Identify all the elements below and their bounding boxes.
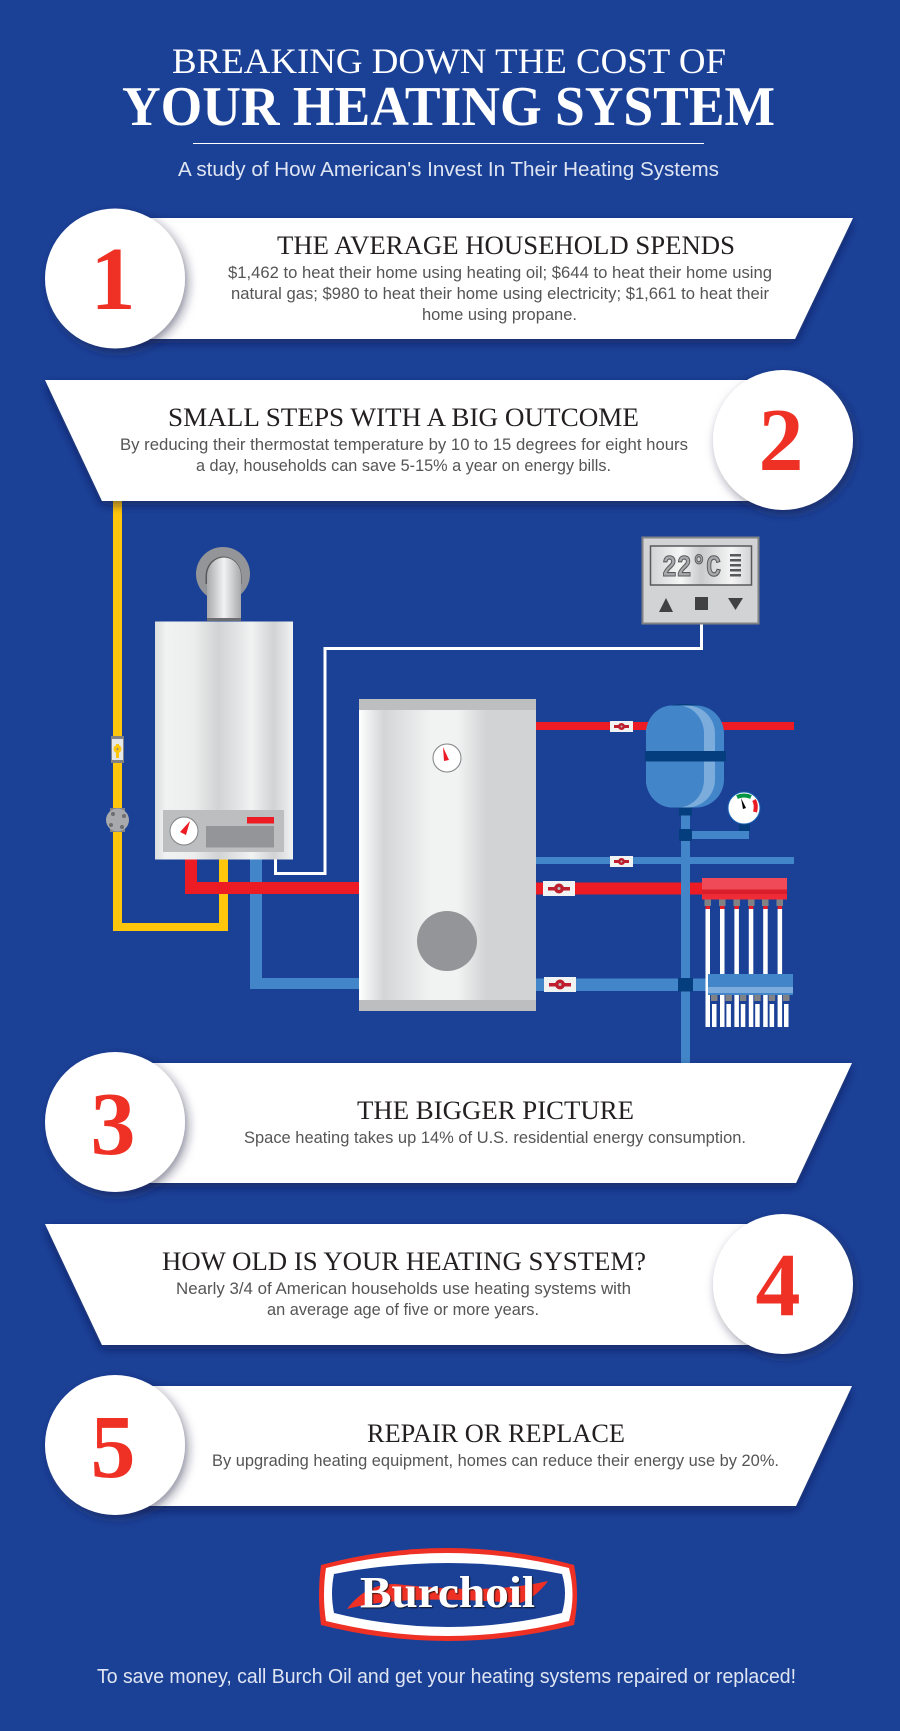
banner 3 shape (100, 1063, 852, 1183)
pressure gauge (728, 792, 760, 831)
panel: how old (45, 1214, 853, 1354)
body 1: natural gas; $980 to heat their home using electricity; $1,661 to heat their (231, 285, 769, 303)
gas regulator (106, 808, 129, 832)
white control wire (276, 622, 702, 874)
tank port (417, 911, 477, 971)
blue return pipe (250, 859, 360, 989)
banner 4 shape (45, 1224, 800, 1345)
boiler (155, 622, 293, 860)
expansion vessel (645, 704, 726, 808)
tank gauge (433, 744, 461, 772)
badge 1 (45, 208, 185, 348)
heading 2: SMALL STEPS WITH A BIG OUTCOME (168, 402, 639, 432)
title block (122, 41, 775, 181)
subtitle: A study of How American's Invest In Their Heating Systems (178, 159, 719, 181)
badge 5 (45, 1375, 185, 1515)
logo: Burchoil (319, 1548, 577, 1641)
title rule (193, 143, 704, 144)
upper red pipe (536, 722, 794, 730)
heating system diagram (106, 501, 794, 1064)
gas valve (111, 736, 124, 763)
valves (543, 721, 633, 992)
body 4 (176, 1280, 631, 1319)
lower red pipe (536, 882, 702, 894)
badge 2 (713, 370, 853, 510)
badge 5: 5 (90, 1398, 136, 1497)
blue manifold (708, 974, 793, 1001)
heading 3: THE BIGGER PICTURE (357, 1095, 634, 1125)
badge 4 (713, 1214, 853, 1354)
panel: repair or replace (45, 1375, 852, 1515)
badge 2: 2 (758, 391, 804, 490)
title line 1: BREAKING DOWN THE COST OF (172, 41, 726, 81)
badge 3: 3 (90, 1075, 136, 1174)
body 1 (228, 264, 772, 324)
body 2 (120, 436, 688, 475)
thermostat buttons (659, 597, 743, 612)
upper blue pipe (536, 857, 794, 864)
footer call to action: To save money, call Burch Oil and get your heating systems repaired or replaced! (97, 1666, 796, 1688)
badge 1: 1 (90, 230, 136, 329)
title line 2: YOUR HEATING SYSTEM (122, 76, 775, 138)
body 5: By upgrading heating equipment, homes can reduce their energy use by 20%. (212, 1452, 779, 1470)
manifold tubes (706, 909, 788, 1027)
banner 1 shape (100, 218, 853, 339)
thermostat readout: 22°C (662, 551, 721, 586)
gauge branch (692, 831, 749, 839)
panel: small steps (45, 370, 853, 510)
yellow gas pipe (113, 501, 228, 931)
lower blue pipe (536, 978, 709, 991)
panel: bigger picture (45, 1052, 852, 1192)
red supply pipe (185, 859, 360, 894)
flue (196, 547, 250, 621)
thermostat (642, 538, 758, 624)
badge 3 (45, 1052, 185, 1192)
panel: average household spends (45, 208, 853, 348)
body 4: an average age of five or more years. (267, 1301, 539, 1319)
storage tank (359, 699, 536, 1011)
logo: Burchoil: Burchoil (360, 1568, 535, 1617)
body 4: Nearly 3/4 of American households use heating systems with (176, 1280, 631, 1298)
boiler gauge (170, 817, 198, 845)
vertical blue riser (681, 812, 690, 1064)
badge 4: 4 (756, 1236, 800, 1335)
boiler control panel (163, 810, 284, 852)
body 2: By reducing their thermostat temperature by 10 to 15 degrees for eight hours (120, 436, 688, 454)
body 1: home using propane. (422, 306, 577, 324)
body 1: $1,462 to heat their home using heating oil; $644 to heat their home using (228, 264, 772, 282)
red manifold (702, 878, 787, 909)
body 2: a day, households can save 5-15% a year on energy bills. (196, 457, 611, 475)
heading 1: THE AVERAGE HOUSEHOLD SPENDS (277, 230, 735, 260)
heading 5: REPAIR OR REPLACE (367, 1418, 625, 1448)
body 3: Space heating takes up 14% of U.S. residential energy consumption. (244, 1129, 746, 1147)
banner 5 shape (100, 1386, 852, 1506)
riser fittings (678, 805, 693, 992)
banner 2 shape (45, 380, 800, 501)
heading 4: HOW OLD IS YOUR HEATING SYSTEM? (162, 1246, 646, 1276)
